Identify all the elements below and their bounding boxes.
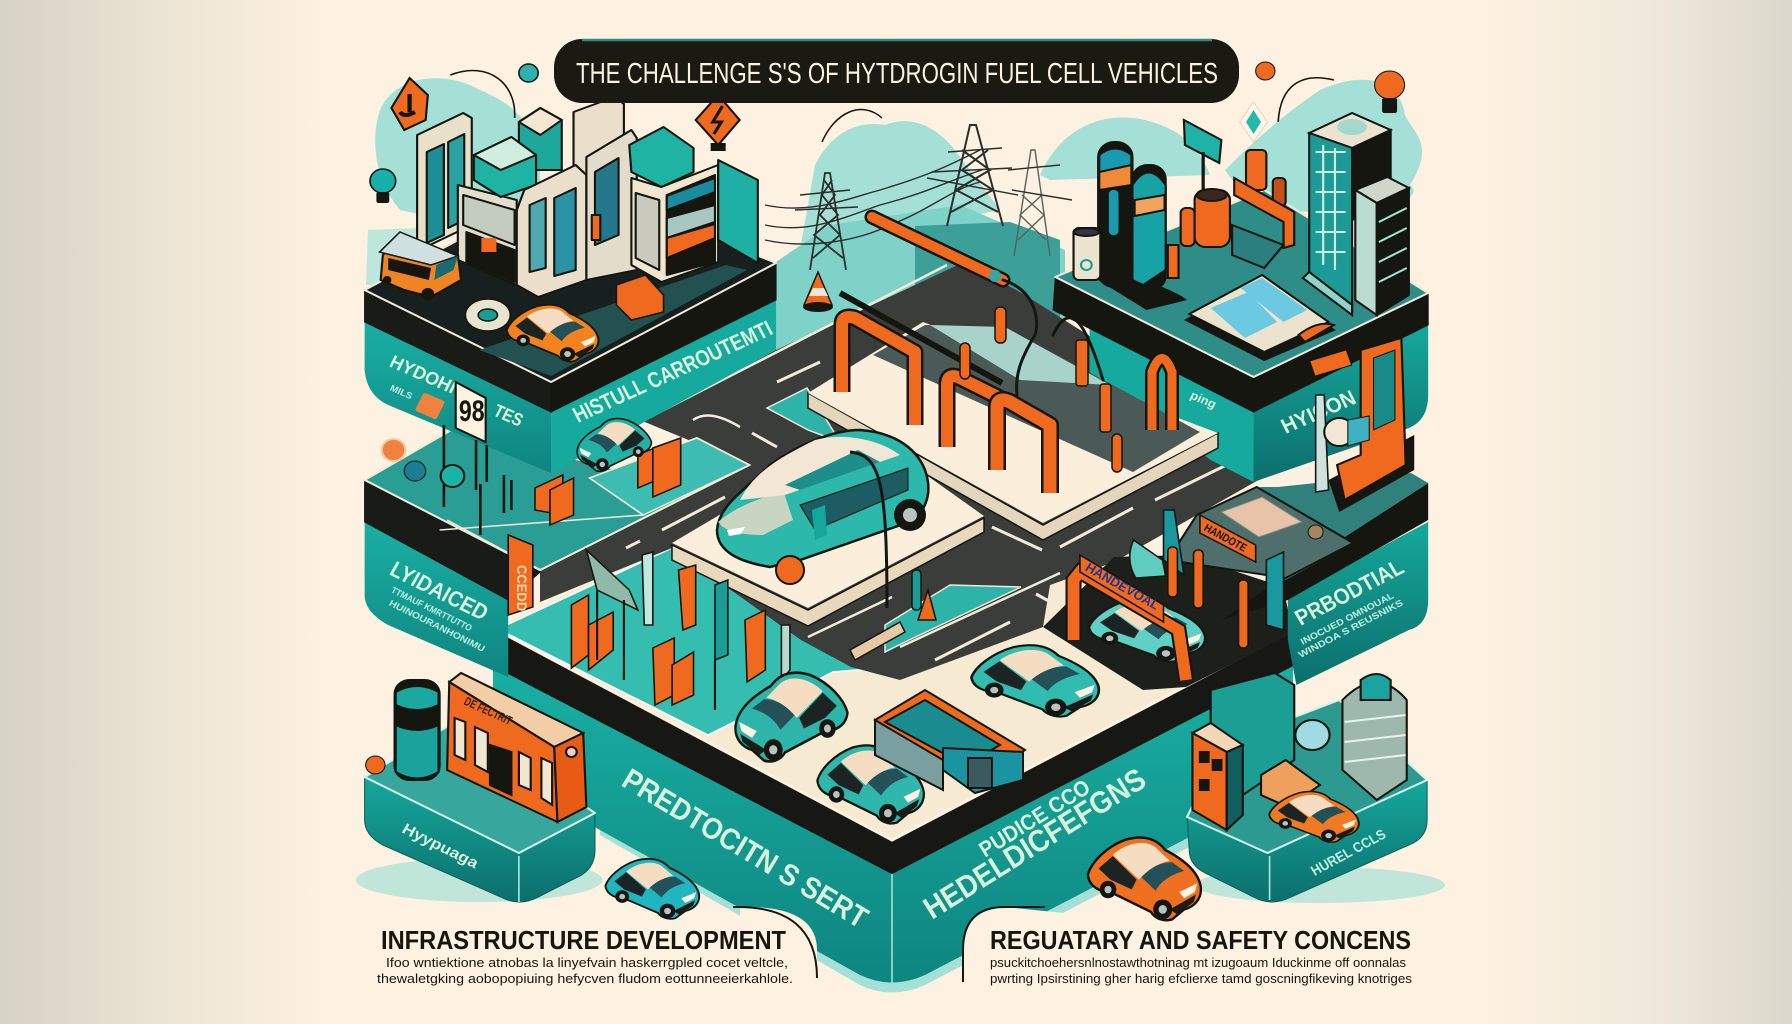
label: HYDOHI: HYDOHI (386, 351, 460, 397)
orange building: DE FECTRIT (462, 694, 515, 728)
vehicle island (672, 430, 984, 626)
small label line 2 on middle-left panel: HUINOURANHONIMU (387, 598, 487, 654)
can (1074, 228, 1100, 280)
label: small lines: INOCUED OMNOUAL (1299, 591, 1396, 647)
icon: traffic cone (803, 272, 833, 312)
kiosk 1 (417, 113, 472, 247)
road cone and hose on lower strip (850, 570, 936, 660)
right transformed group: parked cars and arches (971, 645, 1099, 717)
panel: small left-bottom platform (365, 720, 595, 902)
orange hydrogen dispenser (1310, 338, 1414, 512)
car: teal under arch (1089, 599, 1205, 662)
teal building (1211, 673, 1294, 795)
info box: right (963, 907, 1425, 1024)
car: orange large bottom (1088, 838, 1201, 920)
icon: teal circle (519, 64, 538, 82)
teal box 5 (629, 127, 694, 187)
orange barrier pipe and hoses (872, 217, 1103, 395)
car: teal parked right (971, 645, 1099, 717)
small kiosk (1261, 760, 1320, 807)
arch: HANDEVOAL (1074, 555, 1186, 680)
small label: right-middle panel line: WINDOA S REUSNIKS (1297, 598, 1405, 660)
label: Hyypuaga: Hyypuaga (399, 821, 481, 872)
small label line 1 on middle-left panel: TTMAUF KMRTTUTTO (389, 585, 474, 633)
heading: regulatory and safety: REGUATARY AND SAFETY CONCENS (990, 925, 1411, 955)
right transformed group: arch area (1074, 510, 1284, 680)
cylinder tank (395, 680, 440, 780)
sign: tall orange on road edge (508, 535, 533, 615)
clouds: light teal backdrop (366, 78, 1422, 285)
arch: HANDEVOAL: HANDEVOAL (1083, 560, 1162, 613)
icon: orange sign with exclamation (391, 78, 428, 130)
big teal parking surface (498, 548, 880, 735)
label: HEDELDICFEFGNS: HEDELDICFEFGNS (917, 761, 1152, 926)
orange cylinders (1168, 245, 1179, 278)
orange arches: station (842, 317, 1172, 493)
label: PRBODTIAL: PRBODTIAL (1290, 554, 1408, 630)
left transformed group: signs and cars (508, 419, 847, 761)
power lines and pylons (765, 125, 1072, 270)
sign: 98: 98 (459, 394, 485, 428)
icon: lightning warning sign (696, 95, 740, 151)
kiosk 2 (458, 137, 536, 285)
info box: left (365, 907, 817, 1024)
car: small teal on road (577, 419, 652, 471)
arch 4 (1152, 358, 1172, 430)
panel: small right-bottom platform (1187, 700, 1427, 902)
arch 2 (947, 376, 1000, 447)
book (1186, 275, 1334, 360)
left transformed group: upper-left objects (370, 64, 758, 361)
shadow (356, 858, 602, 902)
icon: balls and marker on middle-left platform (382, 439, 464, 487)
tall cream kiosk (574, 97, 624, 240)
right transformed group: platforms (1053, 190, 1428, 685)
silo (1342, 674, 1407, 800)
teal patch left of station (767, 388, 840, 442)
decorative arc near left sign (450, 71, 515, 118)
orange tower (1192, 723, 1243, 830)
left transformed group: small left-bottom platform (356, 673, 602, 902)
icon: round dial and orange crate (465, 275, 664, 331)
panel: upper-left platform (365, 180, 777, 473)
panel: right-middle platform (1168, 473, 1428, 685)
icon: orange marker on small platform (366, 756, 385, 774)
icon: orange bulb (1375, 71, 1405, 113)
car: orange hatchback (507, 305, 598, 361)
hose post (592, 215, 600, 240)
building: short dark tower (1355, 177, 1409, 315)
kiosk 4 (586, 130, 637, 280)
mini station block (875, 690, 1025, 793)
car: orange van (380, 232, 461, 300)
title pill (554, 39, 1239, 103)
arch: rear gate: HANDOTE (1202, 522, 1249, 555)
decorative arc near right bulb (1278, 78, 1334, 122)
light teal shadow under right small platform (1195, 867, 1445, 903)
sign (1184, 120, 1221, 190)
car: teal small bottom (605, 859, 699, 919)
teal parking patch on road (885, 585, 1021, 652)
kiosk 3 (517, 165, 586, 297)
station platform (808, 322, 1218, 540)
small box (519, 108, 562, 170)
round tank (1295, 720, 1330, 750)
car: teal lower left (735, 673, 847, 761)
left transformed group: platforms (365, 180, 777, 677)
objects: upper-left kiosks (417, 97, 758, 297)
label: HYICON: HYICON (1277, 385, 1360, 438)
decorative arc above centre cloud (822, 110, 882, 142)
light teal shadow of lower platform (600, 820, 1222, 992)
label: LYIDAICED: LYIDAICED (386, 556, 493, 625)
road network (540, 262, 1262, 680)
orange signs on teal patch (535, 438, 681, 525)
orange gate (1234, 178, 1294, 248)
orange bollards (960, 307, 1122, 472)
car: orange right (1269, 792, 1359, 842)
orange signs on lower teal patch (571, 565, 765, 705)
orange building (447, 673, 586, 822)
icon: teal bulb (370, 169, 396, 203)
label: HISTULL CARROUTEMTI: HISTULL CARROUTEMTI (568, 315, 777, 427)
heading: infrastructure development: INFRASTRUCTURE DEVELOPMENT (381, 925, 786, 955)
ground behind the road (776, 205, 1220, 430)
body text: Ifoo wntiektione atnobas la linyefvain haskerrgpled cocet veltcle, (386, 956, 788, 970)
tank 1 (1098, 142, 1132, 287)
arch 3 (997, 400, 1050, 493)
black parking plot (1043, 555, 1293, 690)
lower platform: big teal panels (493, 430, 1293, 983)
icon: small orange tile on panel (415, 392, 445, 420)
body text line 2: pwrting Ipsirstining gher harig efclierxe tamd goscningfikeving knotriges (990, 972, 1412, 986)
objects: right-bottom buildings (1192, 673, 1407, 830)
panel: middle-left platform (365, 428, 749, 677)
label: TES: TES (490, 400, 527, 430)
body text line 2: thewaletgking aobopopiuing hefycven fludom eottunneeierkahlole. (377, 971, 793, 986)
car: teal lower middle (817, 745, 924, 823)
platform band (493, 628, 1293, 873)
kiosk 6 (631, 165, 718, 282)
label: ping: ping (1188, 388, 1219, 411)
label: PUDICE CCO: PUDICE CCO (974, 774, 1095, 862)
side panel 7 (718, 160, 758, 263)
building: tall teal tower (1303, 113, 1391, 315)
arch 1 (842, 317, 915, 425)
platform surface (493, 430, 1293, 840)
sign: 98 (444, 382, 511, 535)
sign: tall orange on road edge: CCEDD (514, 565, 529, 611)
tank 2 (1132, 165, 1166, 290)
icon: orange circle (1256, 62, 1275, 80)
teal posts and shield (586, 550, 790, 710)
teal shield and orange posts (1130, 510, 1284, 648)
black barrier bar (840, 293, 1002, 383)
icon: teal diamond marker (1240, 102, 1267, 142)
right transformed group: small right-bottom platform (1187, 673, 1427, 902)
label: PREDTOCITN S SERT: PREDTOCITN S SERT (616, 763, 873, 935)
right transformed group: upper-right objects (1074, 62, 1409, 360)
objects: upper-right tanks (1074, 120, 1294, 290)
body text: psuckitchoehersnlnostawthotninag mt izugoaum Iduckinme off oonnalas (990, 956, 1406, 970)
car: big teal van (717, 430, 928, 608)
orange sign top (1310, 350, 1352, 376)
title text: THE CHALLENGE S'S OF HYTDROGIN FUEL CELL VEHICLES (576, 58, 1218, 90)
panel: upper-right platform (1053, 190, 1428, 482)
small label on upper-left panel: MILS (388, 383, 414, 401)
label: HUREL CCLS: HUREL CCLS (1308, 827, 1389, 879)
